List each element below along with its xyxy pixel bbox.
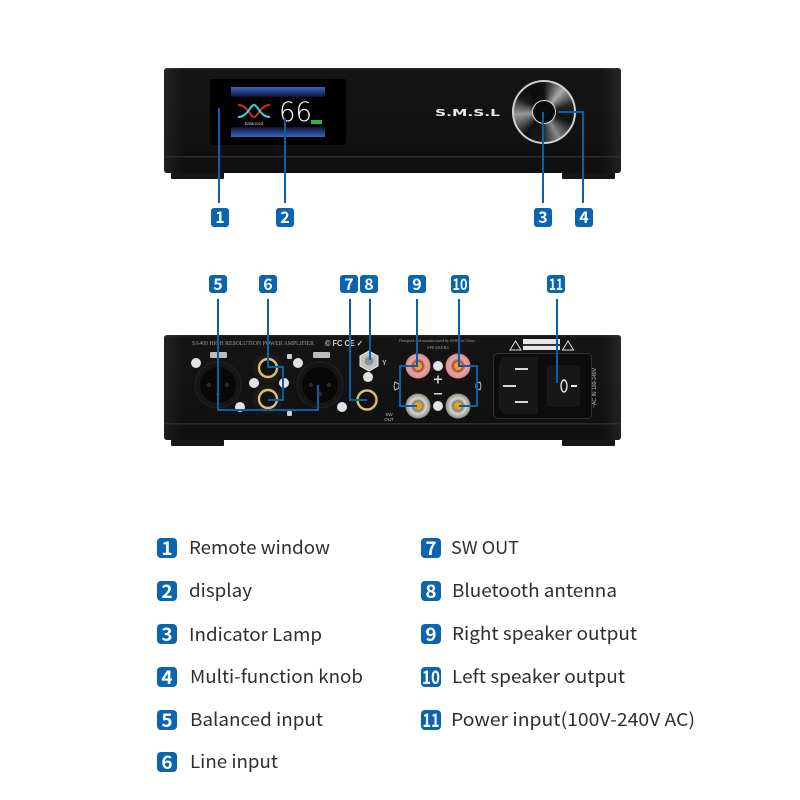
SW out label: SW	[385, 412, 393, 417]
front number badges	[211, 204, 593, 228]
rear number badges: 6	[263, 271, 273, 295]
brand logo: S.M.S.L	[435, 108, 501, 119]
legend item 9: Right speaker output	[452, 620, 637, 646]
front number badges: 2	[280, 204, 290, 228]
speaker icons	[394, 382, 481, 390]
legend item 9: 9	[425, 620, 437, 647]
rear number badges: 5	[213, 271, 223, 295]
model text: SA400 HIGH RESOLUTION POWER AMPLIFIER	[192, 340, 315, 347]
legend item 7: SW OUT	[451, 534, 519, 560]
rear feet	[171, 439, 615, 446]
speaker section text: Designed and manufactured by SMSL in China	[399, 338, 475, 343]
rear callout lines	[218, 299, 557, 410]
legend item 2: display	[189, 577, 253, 603]
rear number badges: 10	[452, 271, 468, 295]
legend item 1: 1	[161, 534, 173, 561]
polarity marks	[434, 376, 442, 394]
IEC inlet	[499, 357, 538, 414]
panel screws	[191, 358, 443, 412]
display window	[210, 79, 346, 145]
balanced XLR inputs	[195, 362, 343, 408]
legend item 11: Power input(100V-240V AC)	[451, 706, 695, 732]
antenna connector	[360, 351, 387, 371]
legend item 6: 6	[161, 748, 173, 775]
rear chassis	[164, 335, 621, 440]
rear number badges: 11	[549, 271, 563, 295]
balanced label: balanced	[245, 121, 264, 126]
legend item 4: Multi-function knob	[190, 663, 363, 689]
legend item 11: 11	[422, 706, 440, 733]
legend item 6	[157, 748, 278, 775]
rear number badges: 7	[344, 271, 354, 295]
legend item 5: 5	[161, 706, 173, 733]
front number badges: 4	[579, 204, 589, 228]
volume number: 66	[279, 97, 312, 128]
legend item 10: Left speaker output	[452, 663, 625, 689]
rear view of amplifier	[164, 335, 621, 446]
legend item 2: 2	[161, 577, 173, 604]
rear number badges: 9	[412, 271, 422, 295]
legend item 2	[157, 577, 253, 604]
front view of amplifier	[164, 68, 621, 179]
front number badges: 1	[215, 204, 225, 228]
warning labels	[510, 339, 574, 350]
green volume tag	[311, 120, 322, 124]
line input jacks	[253, 353, 283, 414]
balanced wave icon	[238, 105, 270, 117]
legend item 7: 7	[425, 534, 437, 561]
rear number badges: 8	[364, 271, 374, 295]
front feet	[171, 172, 615, 179]
legend item 6: Line input	[190, 748, 278, 774]
connector labels	[210, 352, 330, 416]
legend item 3: 3	[161, 620, 173, 647]
legend item 7	[421, 534, 519, 561]
front number badges: 3	[538, 204, 548, 228]
legend item 8: 8	[425, 577, 437, 604]
legend: left column	[157, 534, 363, 775]
front callout lines	[219, 108, 583, 203]
rear view of amplifier: SPEAKERS	[427, 345, 449, 350]
antenna connector: Y	[382, 360, 387, 367]
legend item 8: Bluetooth antenna	[452, 577, 617, 603]
legend item 5: Balanced input	[190, 706, 323, 732]
legend item 1: Remote window	[189, 534, 330, 560]
front chassis	[164, 68, 621, 173]
legend item 3: Indicator Lamp	[189, 621, 322, 647]
rear view of amplifier: OUT	[384, 417, 394, 422]
certification marks: © FC CE ✓	[325, 339, 363, 348]
volume knob	[512, 80, 576, 144]
SW out jack	[358, 390, 376, 410]
legend item 10: 10	[422, 663, 440, 690]
legend: right column	[421, 534, 695, 733]
rear number badges	[209, 271, 565, 295]
speaker binding posts	[406, 354, 470, 418]
legend item 4: 4	[161, 663, 173, 690]
voltage text: ~AC IN 100-240V	[592, 368, 598, 408]
power module	[494, 354, 592, 418]
power rocker switch	[547, 365, 580, 407]
